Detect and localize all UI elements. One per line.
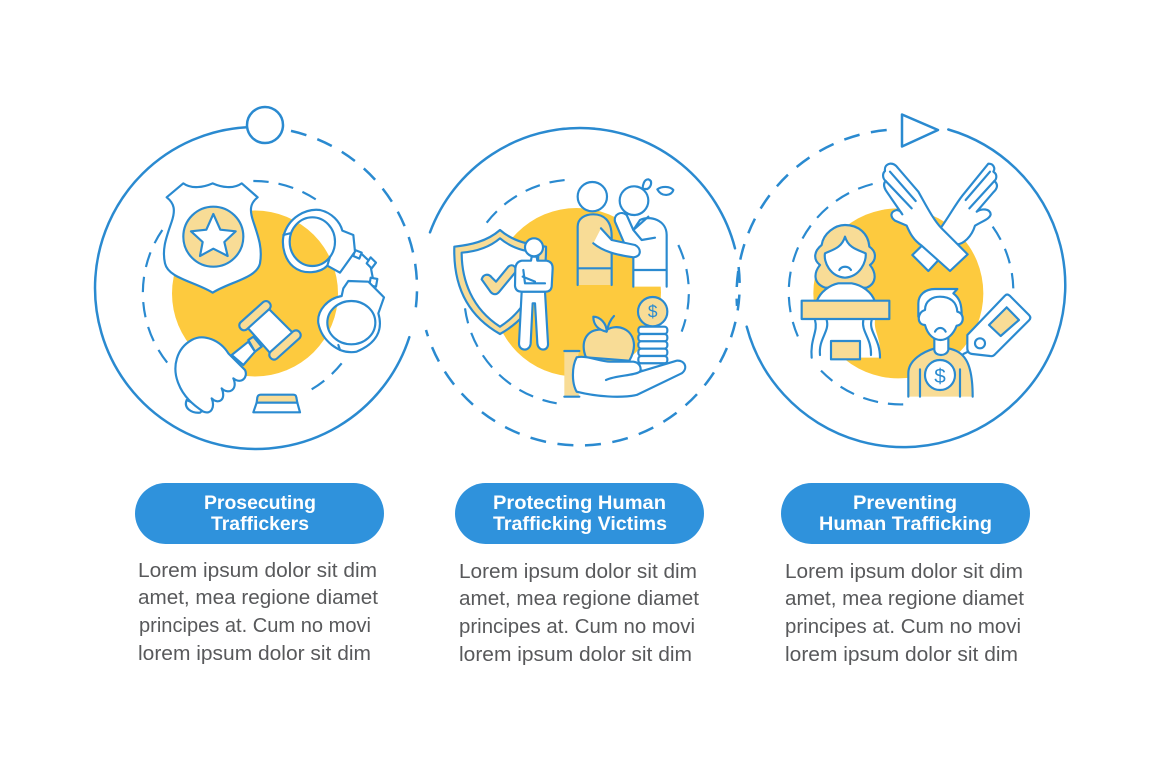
body text: principes at. Cum no movi: [459, 616, 695, 638]
icon: covered woman: [802, 225, 889, 359]
body text: lorem ipsum dolor sit dim: [459, 644, 692, 666]
icon: coins with dollar: [638, 297, 667, 371]
body text: amet, mea regione diamet: [785, 588, 1024, 610]
icon: man with dollar sign: [908, 289, 973, 397]
icon: apple: [584, 316, 634, 361]
body text: Lorem ipsum dolor sit dim: [459, 561, 697, 583]
icon: police badge: [164, 183, 261, 293]
outer ring solid arc: [747, 130, 1065, 447]
body text: lorem ipsum dolor sit dim: [785, 644, 1018, 666]
inner dashed ring: [789, 184, 1013, 404]
body text: amet, mea regione diamet: [138, 587, 378, 609]
icon: person arms crossed: [515, 238, 553, 350]
panel: protecting human trafficking victims: [426, 128, 740, 666]
icon: crossed hands: [883, 164, 997, 271]
body text: [785, 561, 1024, 666]
icon: gavel sound block: [253, 395, 300, 412]
title pill: Traffickers: [211, 514, 309, 535]
icon: gavel in hand: [175, 299, 302, 413]
title pill: Human Trafficking: [819, 514, 992, 535]
body text: amet, mea regione diamet: [459, 588, 699, 610]
body text: Lorem ipsum dolor sit dim: [785, 561, 1023, 583]
icon: price tag: [963, 294, 1030, 356]
yellow circle: [492, 208, 661, 377]
icon: open hand: [564, 351, 685, 397]
title pill: [455, 483, 704, 544]
panel: preventing human trafficking: [737, 114, 1065, 666]
title pill: [135, 483, 384, 544]
icon: coins with dollar: $: [648, 302, 658, 322]
outer ring dashed arc: [737, 130, 887, 306]
body text: principes at. Cum no movi: [139, 615, 371, 637]
title pill: [781, 483, 1030, 544]
icons: justice: [143, 181, 384, 413]
body text: lorem ipsum dolor sit dim: [138, 643, 371, 665]
body text: Lorem ipsum dolor sit dim: [138, 560, 377, 582]
icons: prevention: [789, 164, 1030, 404]
body text: [138, 560, 378, 665]
icon: couple embracing: [578, 179, 673, 287]
start marker circle: [247, 107, 283, 143]
title pill: Prosecuting: [204, 493, 316, 514]
title pill: Protecting Human: [493, 493, 666, 514]
outer ring solid arc: [95, 127, 409, 449]
icon: shield with check: [454, 230, 546, 334]
title pill: Preventing: [853, 493, 957, 514]
yellow circle: [172, 210, 338, 376]
body text: principes at. Cum no movi: [785, 616, 1021, 638]
inner dashed ring: [465, 180, 689, 403]
outer ring solid arc: [430, 128, 735, 248]
icons: protection: [454, 179, 689, 403]
yellow circle: [813, 208, 983, 378]
icon: handcuffs: [283, 210, 384, 352]
outer ring dashed arc: [426, 267, 740, 445]
panel: prosecuting traffickers: [95, 107, 417, 665]
icon: man with dollar sign: $: [934, 365, 946, 388]
inner dashed ring: [143, 181, 342, 389]
title pill: Trafficking Victims: [493, 514, 667, 535]
body text: [459, 561, 699, 666]
outer ring dashed arc: [291, 131, 417, 317]
end marker triangle: [902, 114, 938, 146]
